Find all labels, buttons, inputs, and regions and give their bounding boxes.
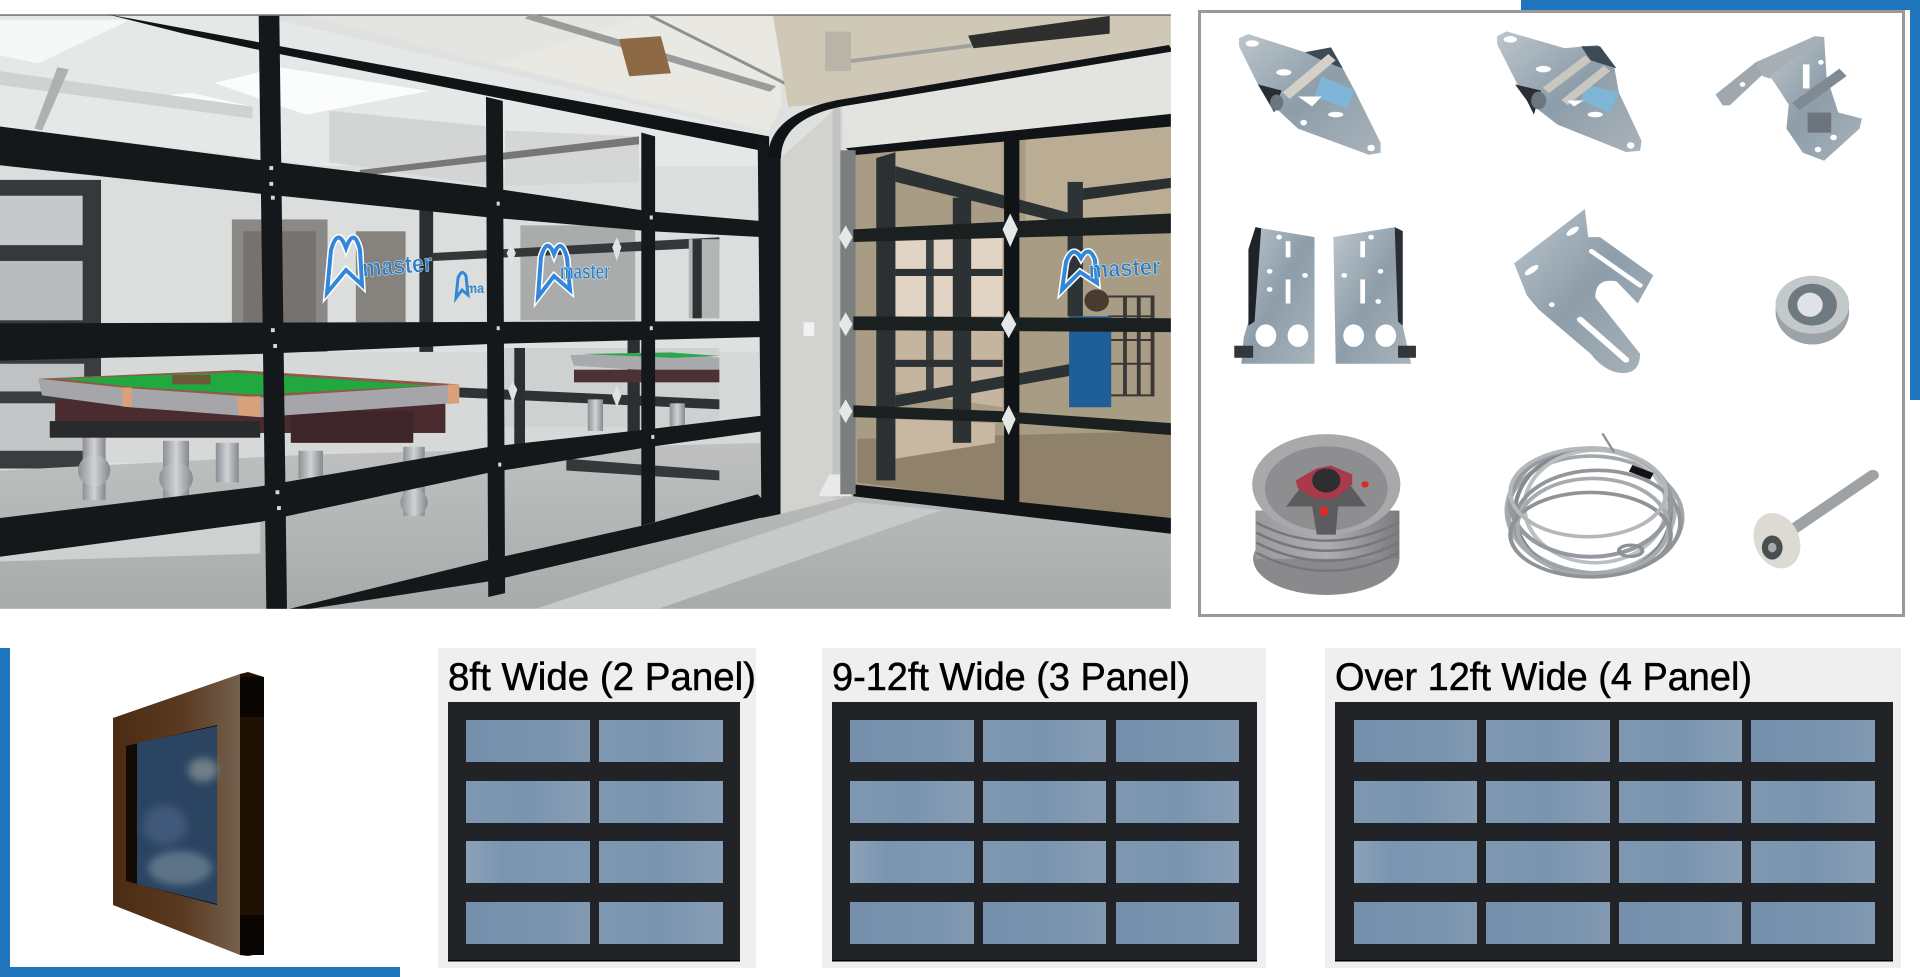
heading: 8ft wide: 8ft Wide (2 Panel) bbox=[448, 656, 756, 699]
size option: over 12ft wide bbox=[1325, 648, 1901, 968]
brand logo 2 bbox=[538, 246, 610, 297]
decorative frame: bottom blue bar bbox=[0, 967, 400, 977]
vertical mullions bbox=[259, 16, 287, 609]
illustration: panel cross section bbox=[113, 672, 264, 956]
hinges bbox=[269, 166, 654, 510]
top rail and horizontal rails of left door bbox=[107, 14, 769, 152]
right door hinges bbox=[839, 214, 1018, 435]
door diagram: 2 panels bbox=[448, 702, 740, 962]
part: slotted bracket bbox=[1514, 209, 1653, 373]
side wall between doors bbox=[781, 103, 842, 514]
brand logo 1 bbox=[327, 237, 433, 293]
decorative frame: top right blue bar bbox=[1521, 0, 1920, 10]
part: cable drum bbox=[1252, 434, 1400, 595]
right upper wall and ceiling bbox=[773, 16, 1171, 107]
room ceiling seen through the left door bbox=[0, 16, 260, 17]
floor bbox=[0, 443, 1171, 609]
person in blue and cage bbox=[1069, 289, 1153, 407]
black track arc and right track bbox=[774, 48, 1171, 158]
decorative frame: right blue bar bbox=[1910, 0, 1920, 400]
size option: 9-12ft wide bbox=[822, 648, 1266, 968]
brand logo 3: master bbox=[1088, 253, 1161, 284]
pool table bbox=[38, 370, 459, 516]
brand logo 2: master bbox=[560, 259, 610, 284]
reflected brand logo: ma bbox=[466, 280, 484, 296]
size option: 8ft wide bbox=[438, 648, 756, 968]
heading: over 12ft wide: Over 12ft Wide (4 Panel) bbox=[1335, 656, 1752, 699]
right door frame bbox=[846, 114, 1171, 155]
photo: glass garage doors in showroom bbox=[0, 14, 1171, 609]
part: steel cable coil bbox=[1501, 433, 1689, 580]
back room window bbox=[0, 180, 101, 326]
brand logo 1: master bbox=[361, 249, 433, 283]
part: single hinge bbox=[1239, 34, 1381, 155]
heading: 9-12ft wide: 9-12ft Wide (3 Panel) bbox=[832, 656, 1190, 699]
white hinges on inside of left door bbox=[507, 237, 621, 407]
decorative frame: left blue bar bbox=[0, 648, 10, 977]
door diagram: 3 panels bbox=[832, 702, 1257, 962]
upper tiled wall bbox=[306, 16, 769, 17]
panel: hardware parts bbox=[1200, 12, 1904, 616]
part: top bracket bbox=[1716, 36, 1862, 161]
mid wall bbox=[326, 166, 758, 220]
lower wall bbox=[232, 352, 434, 362]
pool table reflection bbox=[570, 352, 719, 435]
part: pair of bottom brackets bbox=[1234, 227, 1416, 364]
back door bbox=[232, 219, 328, 362]
part: double hinge bbox=[1497, 31, 1642, 152]
part: bearing bbox=[1776, 276, 1849, 345]
part: roller bbox=[1747, 475, 1873, 573]
right door interior bbox=[846, 117, 1171, 530]
brand logo 3 bbox=[1062, 251, 1161, 290]
door diagram: 4 panels bbox=[1335, 702, 1893, 962]
reflected brand logo bbox=[456, 272, 484, 298]
